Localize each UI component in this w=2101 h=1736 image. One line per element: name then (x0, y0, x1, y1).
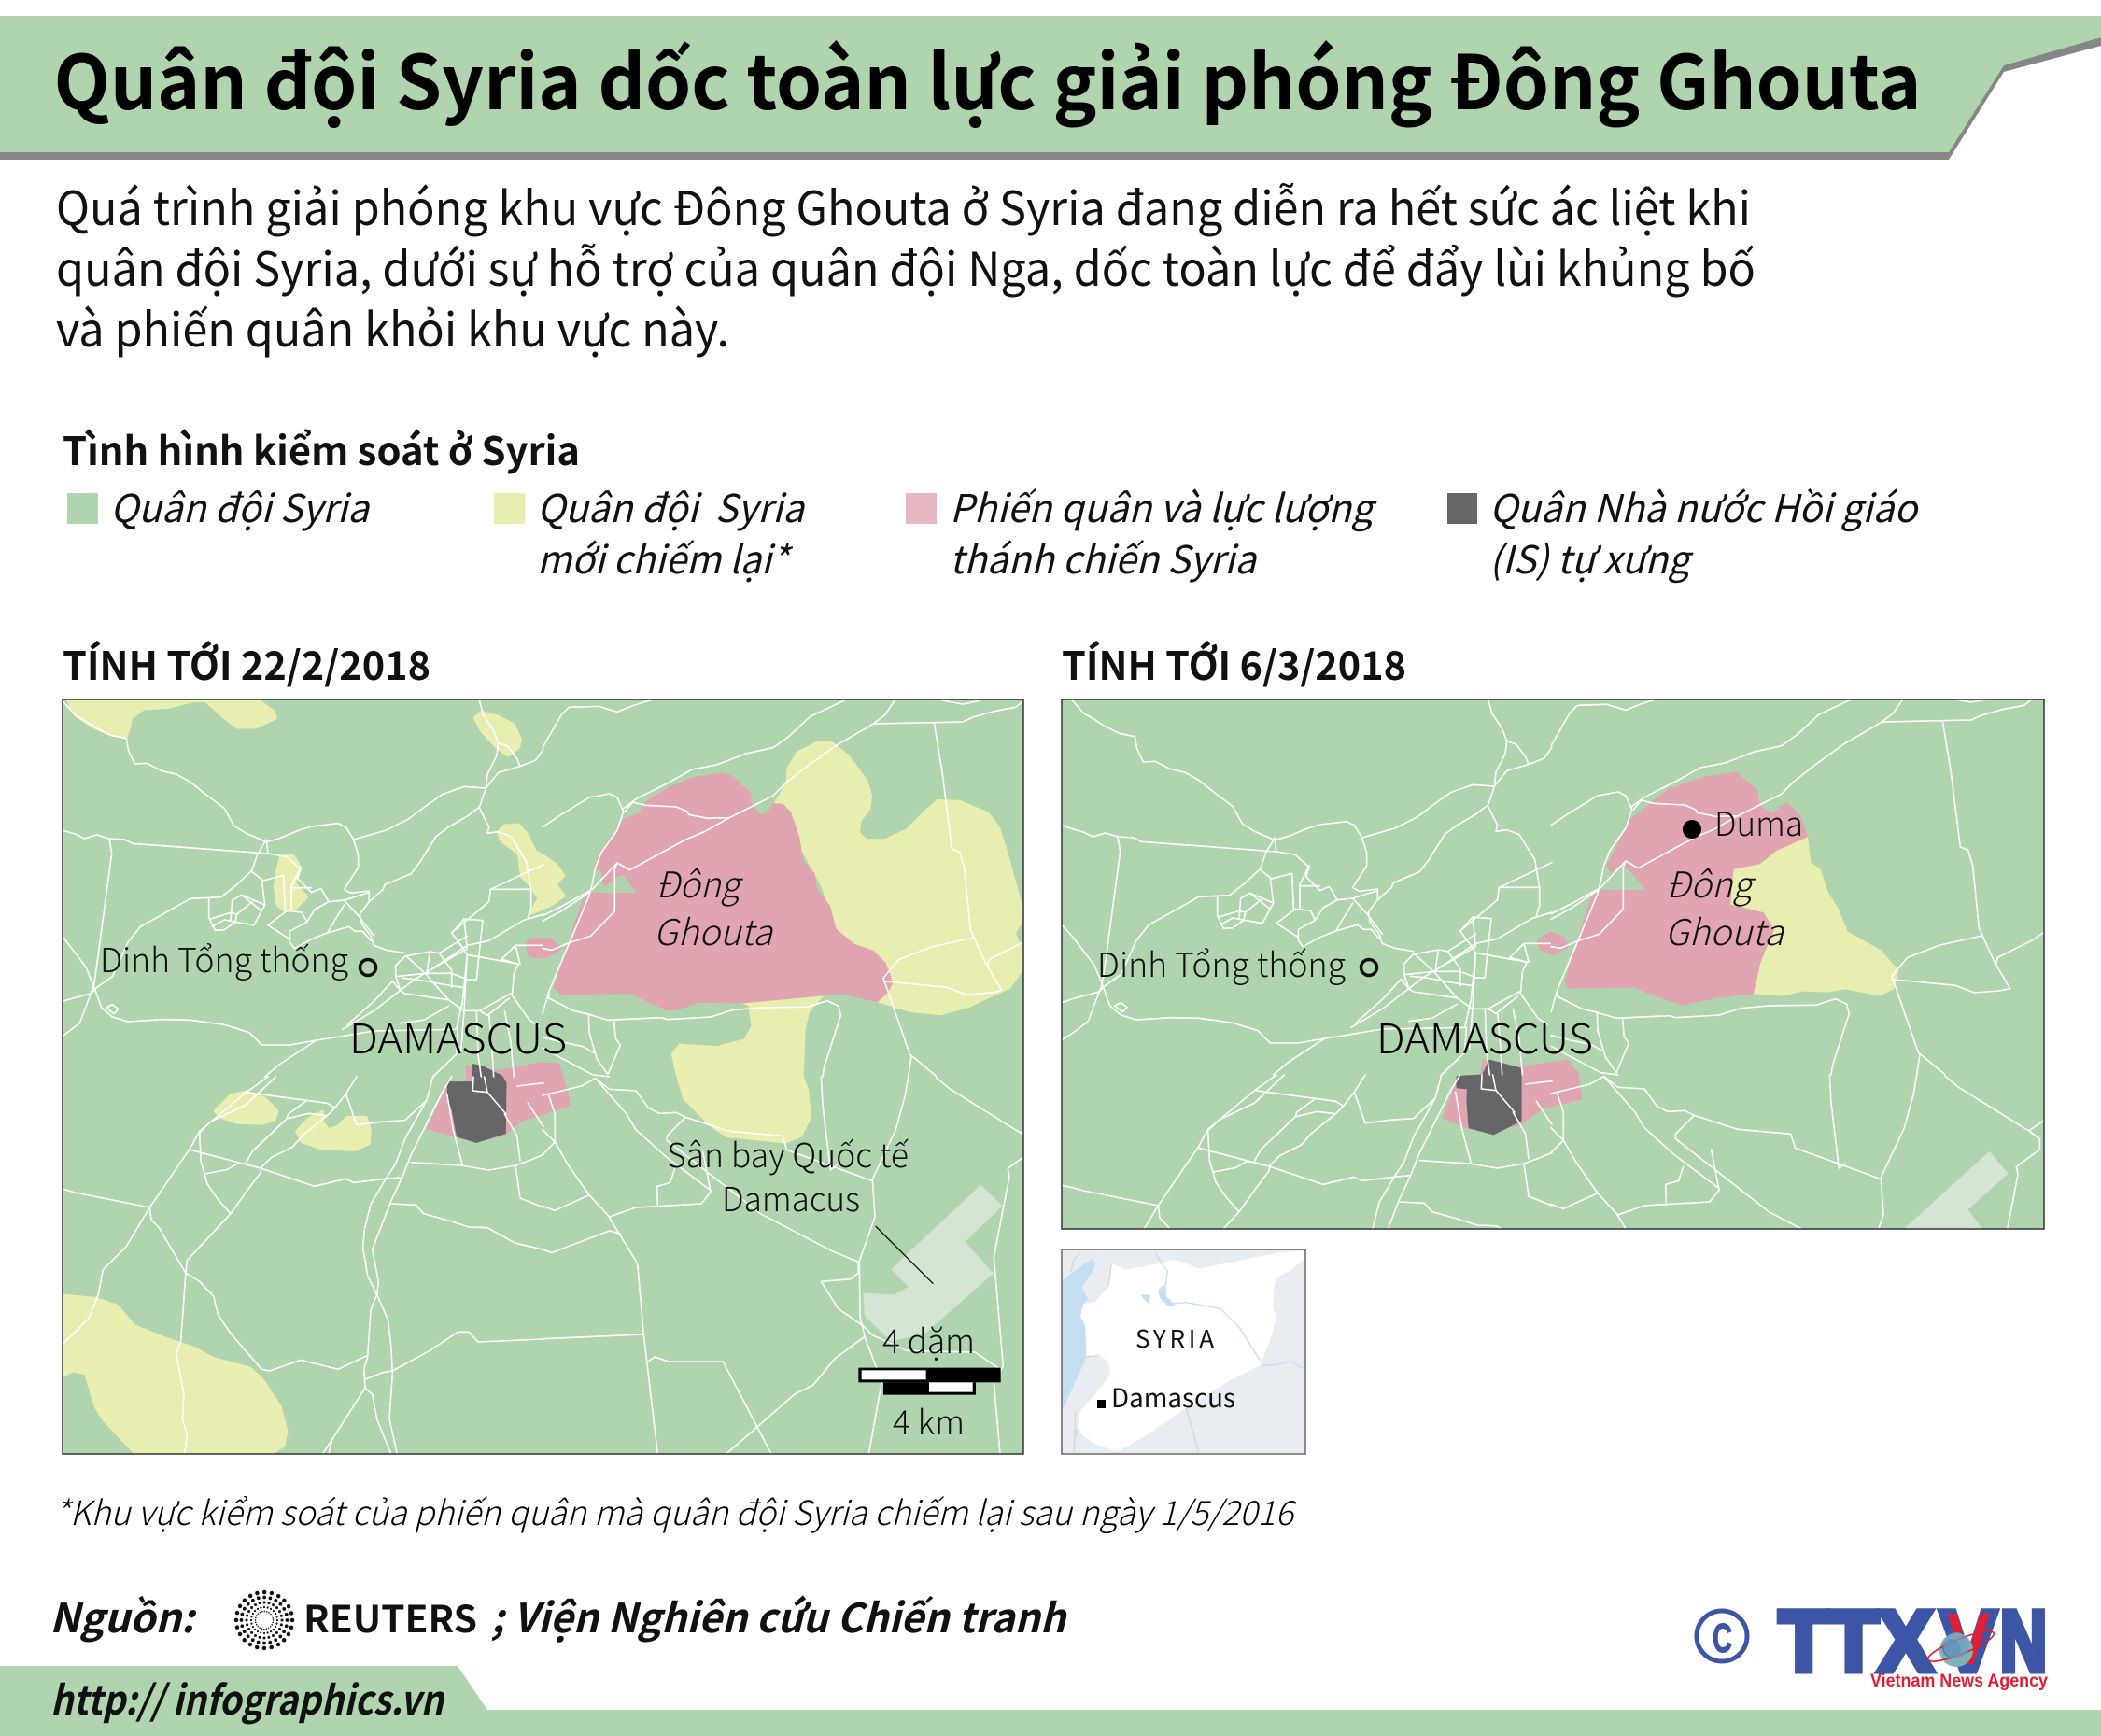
Reuters wordmark: REUTERS (303, 1589, 477, 1644)
label: Damascus: Damascus (1111, 1378, 1235, 1416)
legend item: IS: Quân Nhà nước Hồi giáo (1489, 477, 1920, 533)
label: airport: Sân bay Quốc tế (667, 1129, 909, 1178)
map areas 6/3 (1445, 773, 2009, 1229)
legend item: rebels: Phiến quân và lực lượng (950, 477, 1377, 533)
logo: TTXVN (1697, 1594, 2048, 1691)
label: scale km: 4 km (893, 1396, 965, 1445)
legend (67, 477, 1920, 585)
legend heading: Tình hình kiểm soát ở Syria (63, 420, 580, 477)
label: Syria: SYRIA (1135, 1320, 1214, 1355)
label: presidential palace: Dinh Tổng thống (100, 934, 348, 982)
legend item: IS: (IS) tự xưng (1489, 529, 1694, 585)
logo: TTXVN: Vietnam News Agency (1870, 1672, 2048, 1691)
label: presidential palace: Dinh Tổng thống (1097, 939, 1346, 987)
yellow areas south-west (63, 1092, 370, 1454)
intro text (56, 172, 1756, 360)
footnote: *Khu vực kiểm soát của phiến quân mà quân đội Syria chiếm lại sau ngày 1/5/2016 (55, 1487, 1297, 1535)
icon: Reuters logo (236, 1592, 292, 1648)
rivers (1155, 1251, 1304, 1369)
website url: http:// infographics.vn (50, 1669, 445, 1727)
panel: map 22/2/2018 (50, 690, 1040, 1454)
label: Duma: Duma (1714, 797, 1803, 846)
scale bar (858, 1368, 1001, 1395)
icon: copyright (1697, 1611, 1747, 1661)
label: airport (667, 1129, 909, 1221)
intro text: Quá trình giải phóng khu vực Đông Ghouta ở Syria đang diễn ra hết sức ác liệt khi (56, 172, 1751, 239)
intro text: và phiến quân khỏi khu vực này. (56, 293, 729, 360)
legend item: rebels (906, 477, 1377, 585)
legend item: IS (1447, 477, 1920, 585)
southern rebel and IS areas (429, 1064, 569, 1141)
icon: globe (1925, 1626, 1996, 1667)
source line (49, 1587, 1067, 1648)
label: airport: Damacus (722, 1173, 860, 1221)
roads 6/3 (1059, 688, 2049, 1452)
label: Eastern Ghouta: Ghouta (654, 904, 773, 955)
leader line: airport (876, 1226, 933, 1284)
legend item: retaken (494, 477, 806, 585)
label: Damascus: DAMASCUS (349, 1006, 567, 1066)
title banner (0, 16, 2101, 160)
map heading: 22/2/2018: TÍNH TỚI 22/2/2018 (63, 635, 430, 692)
sea (1062, 1259, 1096, 1408)
map heading: 6/3/2018: TÍNH TỚI 6/3/2018 (1062, 635, 1406, 692)
legend item: retaken: mới chiếm lại* (537, 529, 794, 585)
label: Eastern Ghouta: Đông (656, 856, 743, 908)
areas around Eastern Ghouta (527, 743, 1022, 1142)
legend item: rebels: thánh chiến Syria (950, 529, 1258, 585)
icon: copyright: C (1713, 1616, 1732, 1661)
footer band (0, 1666, 2101, 1736)
label: Damascus: DAMASCUS (1376, 1006, 1593, 1066)
wordmark: N: N (2000, 1594, 2047, 1689)
wordmark: red V: V (1947, 1598, 1990, 1680)
legend item: retaken: Quân đội Syria (537, 477, 806, 533)
label: Eastern Ghouta: Ghouta (1665, 904, 1784, 955)
source line: ; Viện Nghiên cứu Chiến tranh (491, 1587, 1067, 1644)
yellow areas north-west (67, 699, 564, 914)
wordmark: TTX: TTX (1779, 1594, 1933, 1689)
label: Eastern Ghouta (1665, 856, 1784, 955)
intro text: quân đội Syria, dưới sự hỗ trợ của quân đội Nga, dốc toàn lực để đẩy lùi khủng bố (56, 233, 1756, 300)
panel: map 6/3/2018 (1061, 699, 2045, 1230)
source line: Nguồn: (49, 1587, 197, 1644)
label: scale miles: 4 dặm (882, 1315, 975, 1363)
label: Eastern Ghouta (654, 856, 773, 955)
borders (1071, 1252, 1199, 1452)
panel: locator map (1062, 1249, 1305, 1454)
title: Quân đội Syria dốc toàn lực giải phóng Đông Ghouta (54, 23, 1922, 132)
airport (863, 1185, 1003, 1341)
legend item: Syrian army: Quân đội Syria (110, 477, 371, 533)
Syria (1078, 1251, 1304, 1452)
label: Eastern Ghouta: Đông (1666, 856, 1756, 908)
wordmark: V: V (1940, 1594, 1996, 1689)
